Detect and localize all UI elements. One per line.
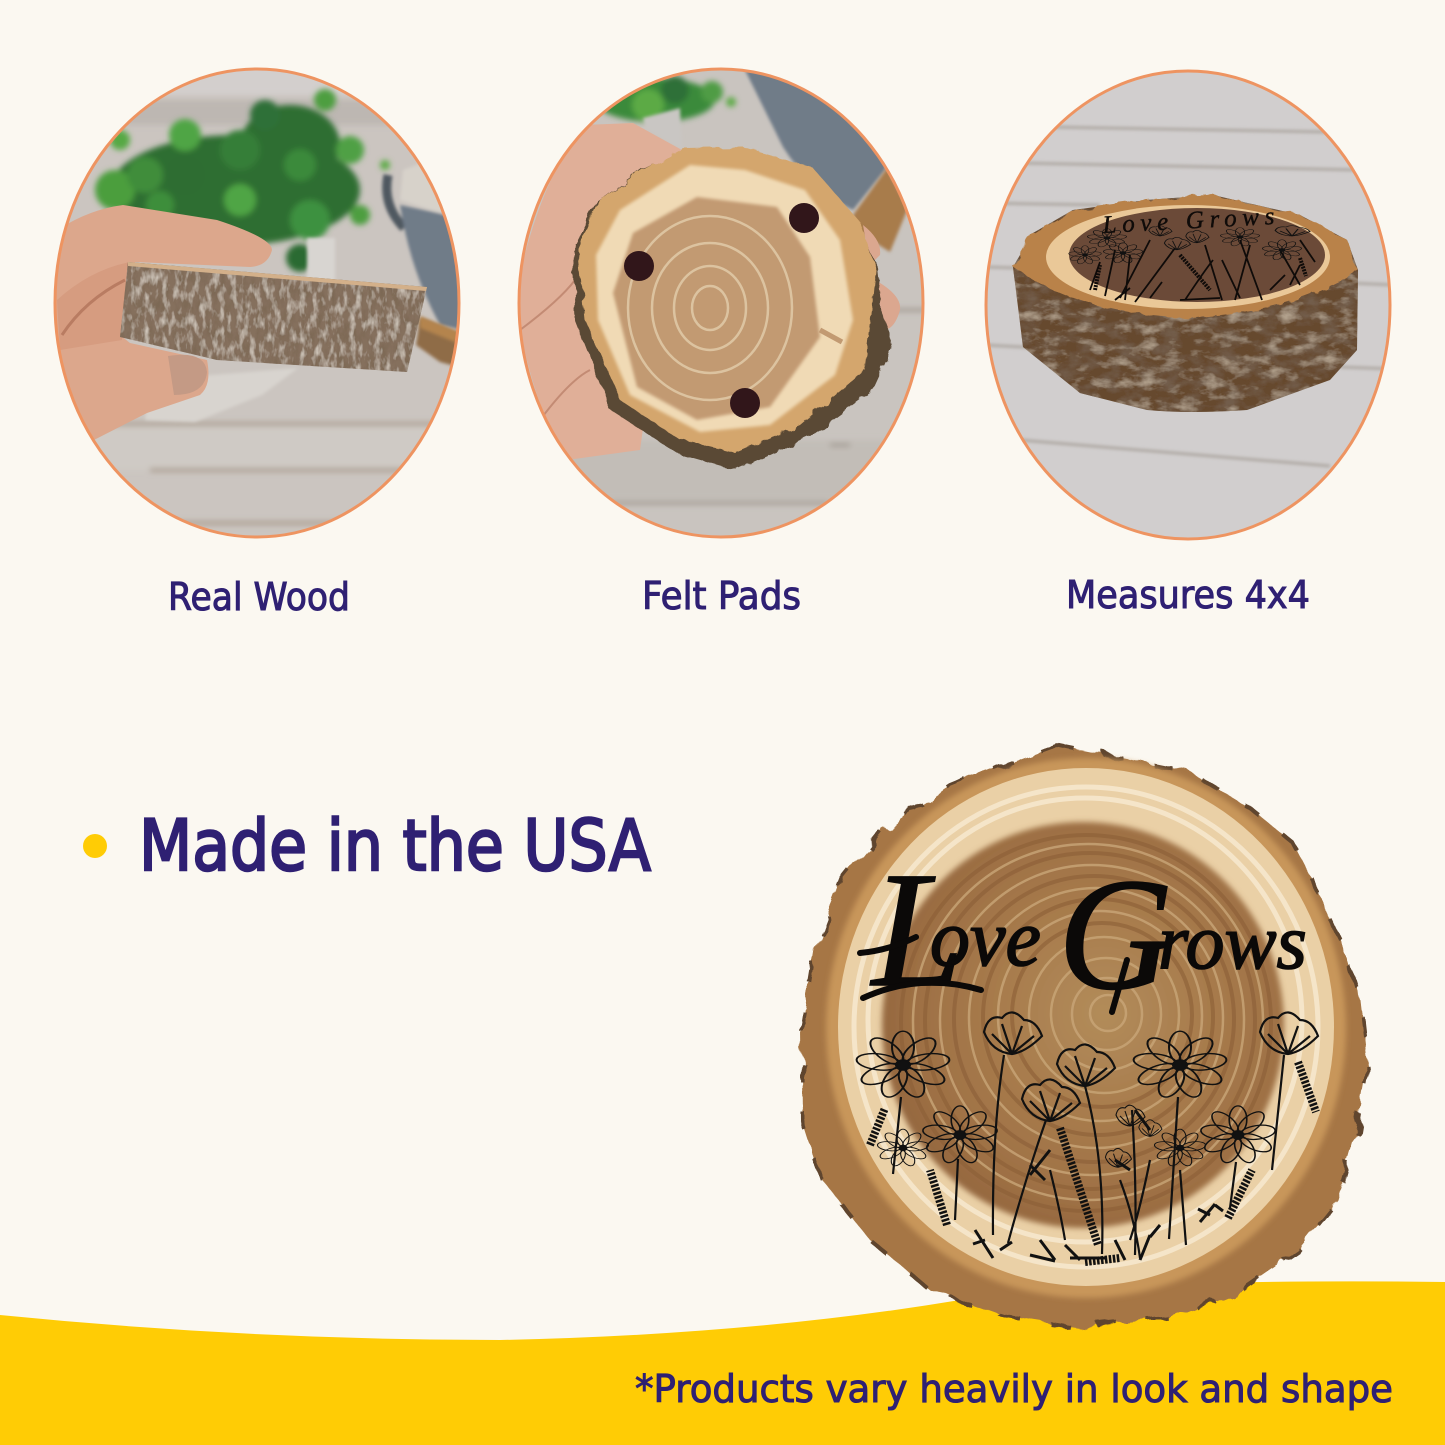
engraving (1090, 240, 1315, 302)
wooden disc underside (572, 147, 893, 470)
felt pad (730, 388, 760, 418)
footnote: *Products vary heavily in look and shape (635, 1367, 1393, 1411)
caption: felt pads: Felt Pads (642, 574, 801, 618)
mug (387, 160, 462, 330)
hand (515, 123, 682, 460)
panel: measures photo: Love Grows (1101, 203, 1275, 239)
panel: measures photo (985, 68, 1395, 543)
product: engraved wood slice (802, 745, 1368, 1328)
plant (595, 76, 736, 122)
caption: real wood: Real Wood (168, 575, 350, 619)
top of slice (1013, 195, 1358, 318)
engraved title: love grows: rows (1158, 898, 1307, 985)
bark slab (120, 262, 427, 372)
heading: made in the usa: Made in the USA (139, 805, 651, 887)
felt pad (789, 203, 819, 233)
yellow wave band (0, 1281, 1445, 1445)
engraved title: love grows: ove (930, 895, 1061, 983)
engraved title: love grows (860, 838, 1307, 1023)
white pot (145, 368, 298, 422)
felt pad (624, 251, 654, 281)
caption: measures: Measures 4x4 (1066, 573, 1310, 617)
hand (50, 205, 272, 442)
bullet (83, 834, 107, 858)
engraved title: love grows: G (1058, 845, 1174, 1023)
plant (95, 89, 390, 272)
panel: real wood photo (50, 65, 465, 545)
engraved title: love grows: L (870, 838, 964, 1021)
bark side (1013, 195, 1358, 412)
mug (745, 68, 890, 210)
engraved flowers (855, 1012, 1318, 1262)
panel: felt pads photo (515, 65, 930, 545)
